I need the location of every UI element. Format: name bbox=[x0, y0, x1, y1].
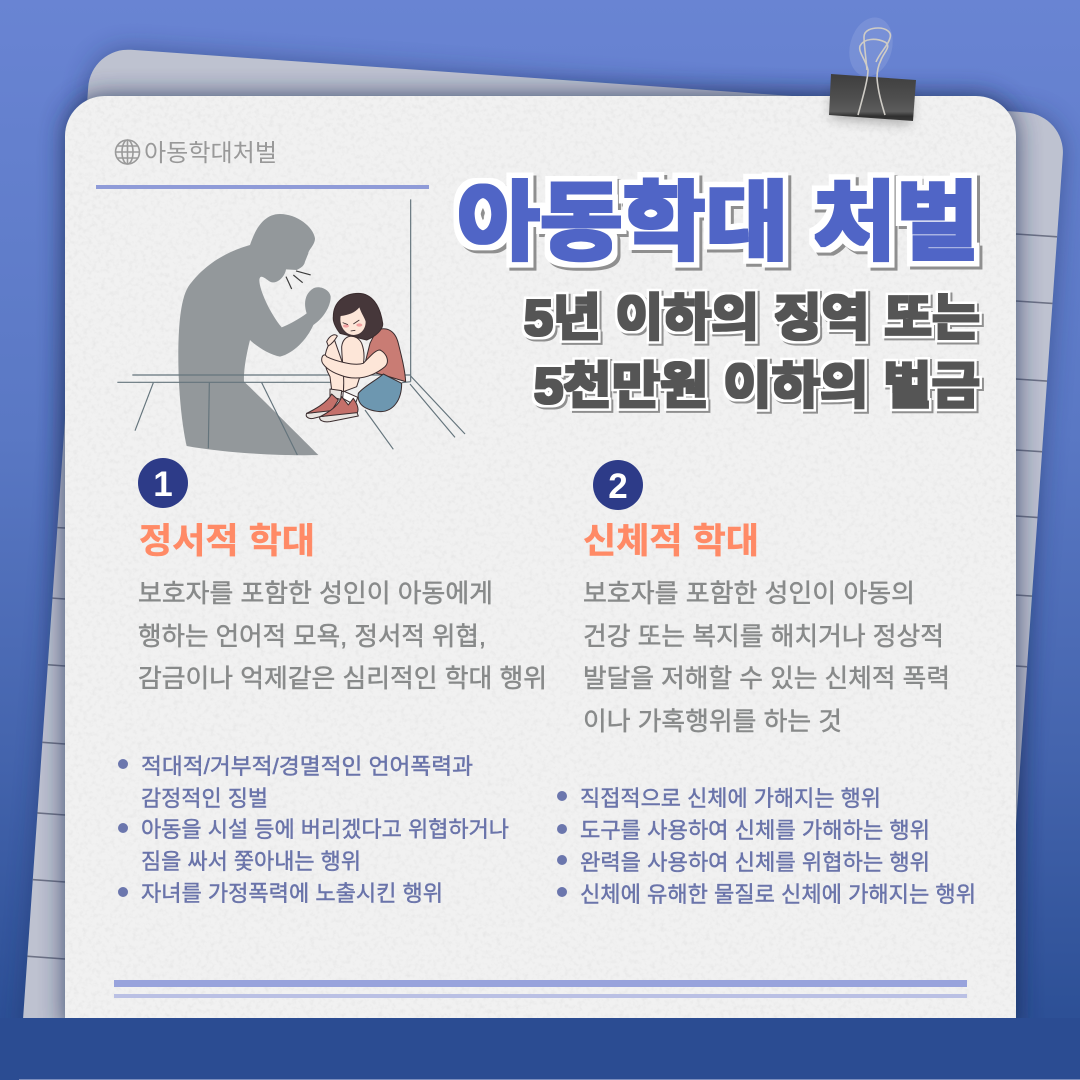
room lines bbox=[117, 199, 465, 455]
description: 보호자를 포함한 성인이 아동의 bbox=[583, 580, 915, 608]
bullet list: 아동을 시설 등에 버리겠다고 위협하거나 bbox=[141, 817, 509, 842]
panel: emotional abuse bbox=[118, 458, 547, 906]
bullet list: 완력을 사용하여 신체를 위협하는 행위 bbox=[580, 850, 930, 875]
shout marks bbox=[286, 271, 311, 289]
divider under header bbox=[96, 185, 429, 189]
small header label: 아동학대처벌 bbox=[144, 140, 277, 167]
title: 아동학대 처벌 bbox=[457, 175, 979, 271]
number badge 2 bbox=[593, 460, 643, 510]
description: 건강 또는 복지를 해치거나 정상적 bbox=[583, 623, 944, 651]
heading: 신체적 학대 bbox=[583, 522, 759, 561]
illustration: shouting shadow and crouching child bbox=[117, 199, 465, 455]
bullet list: 짐을 싸서 쫓아내는 행위 bbox=[141, 849, 361, 874]
description: 감금이나 억제같은 심리적인 학대 행위 bbox=[138, 665, 547, 693]
description: 발달을 저해할 수 있는 신체적 폭력 bbox=[583, 665, 950, 693]
description: 행하는 언어적 모욕, 정서적 위협, bbox=[138, 623, 486, 651]
description: 보호자를 포함한 성인이 아동에게 bbox=[138, 580, 493, 608]
subtitle: 5년 이하의 징역 또는 bbox=[524, 290, 980, 346]
bullet list: 직접적으로 신체에 가해지는 행위 bbox=[580, 786, 881, 811]
bullet list bbox=[557, 786, 976, 907]
panel: front paper bbox=[65, 96, 1016, 1030]
icon: binder clip bbox=[829, 13, 916, 124]
number badge 2: 2 bbox=[608, 467, 628, 506]
child bbox=[306, 293, 406, 422]
icon: globe bbox=[116, 140, 140, 164]
bullet list: 자녀를 가정폭력에 노출시킨 행위 bbox=[141, 881, 443, 906]
bullet list: 감정적인 징벌 bbox=[141, 786, 268, 811]
description: 이나 가혹행위를 하는 것 bbox=[583, 708, 842, 736]
subtitle bbox=[524, 290, 980, 414]
description bbox=[138, 580, 547, 693]
panel: physical abuse bbox=[557, 460, 976, 907]
bottom band bbox=[0, 1018, 1080, 1080]
bullet list: 도구를 사용하여 신체를 가해하는 행위 bbox=[580, 818, 930, 843]
bottom rules bbox=[114, 980, 967, 998]
heading: 정서적 학대 bbox=[139, 522, 315, 561]
bullet list: 적대적/거부적/경멸적인 언어폭력과 bbox=[141, 754, 473, 779]
description bbox=[583, 580, 950, 736]
shadow figure bbox=[178, 214, 331, 455]
bullet list bbox=[118, 754, 509, 906]
number badge 1 bbox=[138, 458, 188, 508]
number badge 1: 1 bbox=[153, 465, 173, 504]
bullet list: 신체에 유해한 물질로 신체에 가해지는 행위 bbox=[580, 882, 976, 907]
subtitle: 5천만원 이하의 벌금 bbox=[534, 358, 980, 414]
